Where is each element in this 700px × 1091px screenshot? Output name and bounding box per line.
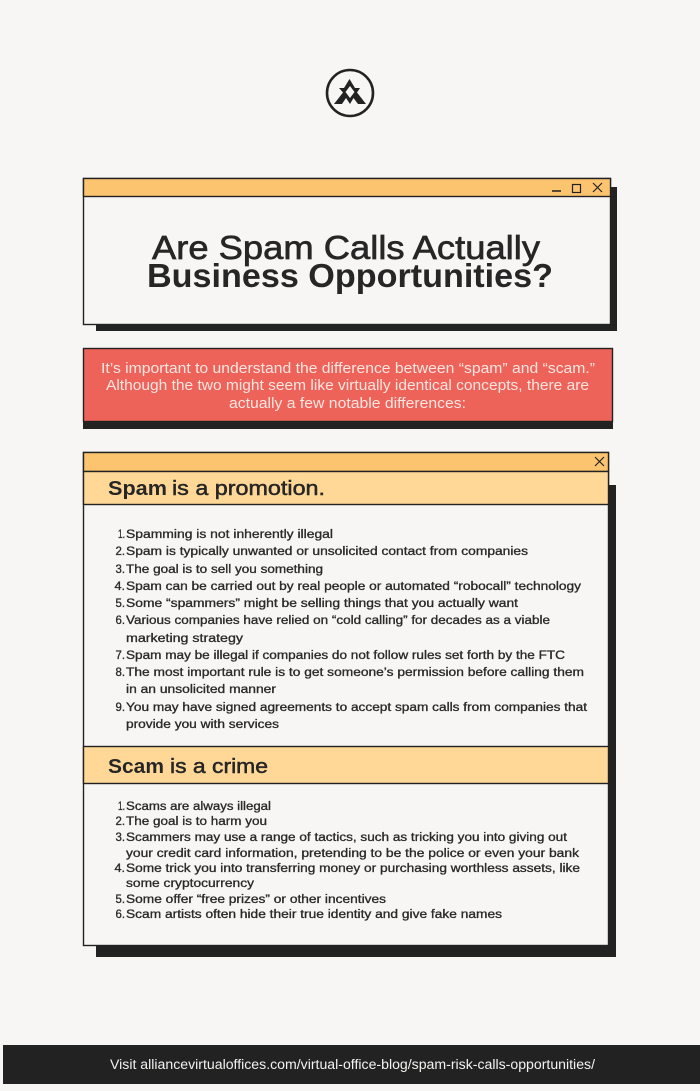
list: spam points: provide you with services xyxy=(126,719,279,731)
list: scam points: Scammers may use a range of tactics, such as tricking you into giving out xyxy=(126,832,568,844)
icon: close xyxy=(593,183,602,192)
list: scam points: 4. xyxy=(114,863,125,875)
list: scam points: 3. xyxy=(116,832,125,844)
list: scam points: 5. xyxy=(116,894,125,906)
list: scam points: Some trick you into transferring money or purchasing worthless assets, like xyxy=(126,863,580,875)
list: spam points: The most important rule is to get someone’s permission before calling them xyxy=(126,667,584,679)
list: spam points: Some “spammers” might be selling things that you actually want xyxy=(126,598,519,610)
title xyxy=(147,229,553,294)
intro text: actually a few notable differences: xyxy=(229,395,466,412)
title bar xyxy=(84,178,610,196)
list: scam points: 1. xyxy=(118,801,125,813)
list: spam points: Spamming is not inherently illegal xyxy=(126,529,333,541)
list: spam points: 8. xyxy=(116,667,125,679)
heading: scam: Scam xyxy=(108,755,164,778)
panel: intro callout xyxy=(83,348,613,429)
heading: spam: is a promotion. xyxy=(172,477,325,500)
list: spam points: You may have signed agreements to accept spam calls from companies that xyxy=(126,702,588,714)
title bar xyxy=(84,452,608,472)
list: spam points: 1. xyxy=(118,529,125,541)
panel: title window xyxy=(84,178,617,331)
list: spam points: The goal is to sell you something xyxy=(126,564,323,576)
list: spam points: 4. xyxy=(114,581,125,593)
list: spam points: marketing strategy xyxy=(126,633,243,645)
list: spam points: Spam may be illegal if companies do not follow rules set forth by the FTC xyxy=(126,650,565,662)
list: spam points: 5. xyxy=(116,598,125,610)
footer bar: Visit alliancevirtualoffices.com/virtual-office-blog/spam-risk-calls-opportunities/ xyxy=(110,1057,595,1072)
title: Business Opportunities? xyxy=(147,257,553,294)
icon: logo xyxy=(327,70,373,116)
icon: minimize xyxy=(552,190,561,192)
icon: maximize xyxy=(572,184,580,192)
panel: comparison window xyxy=(84,452,616,957)
list: spam points: 6. xyxy=(116,615,125,627)
list: spam points: 3. xyxy=(116,564,125,576)
list: scam points: 2. xyxy=(116,816,125,828)
footer bar xyxy=(3,1045,700,1084)
icon: close xyxy=(595,457,604,466)
title: Are Spam Calls Actually xyxy=(152,229,541,266)
list: scam points: Some offer “free prizes” or other incentives xyxy=(126,894,386,906)
list: spam points xyxy=(114,529,588,731)
list: scam points: your credit card information, pretending to be the police or even your bank xyxy=(126,848,579,860)
intro text xyxy=(101,360,595,412)
heading: scam xyxy=(84,746,608,784)
intro text: Although the two might seem like virtually identical concepts, there are xyxy=(106,377,589,394)
list: spam points: Spam is typically unwanted or unsolicited contact from companies xyxy=(126,546,528,558)
list: spam points: in an unsolicited manner xyxy=(126,684,276,696)
list: scam points: some cryptocurrency xyxy=(126,878,254,890)
list: scam points: Scams are always illegal xyxy=(126,801,271,813)
list: spam points: 2. xyxy=(116,546,125,558)
list: scam points: The goal is to harm you xyxy=(126,816,267,828)
list: spam points: Various companies have relied on “cold calling” for decades as a viable xyxy=(126,615,550,627)
list: spam points: 9. xyxy=(116,702,125,714)
list: scam points: 6. xyxy=(116,909,125,921)
heading: scam: is a crime xyxy=(170,755,268,778)
list: spam points: Spam can be carried out by real people or automated “robocall” technology xyxy=(126,581,581,593)
heading: spam xyxy=(84,472,608,504)
list: scam points xyxy=(114,801,580,921)
list: scam points: Scam artists often hide their true identity and give fake names xyxy=(126,909,502,921)
heading: spam: Spam xyxy=(108,477,167,500)
list: spam points: 7. xyxy=(116,650,125,662)
intro text: It’s important to understand the difference between “spam” and “scam.” xyxy=(101,360,595,377)
